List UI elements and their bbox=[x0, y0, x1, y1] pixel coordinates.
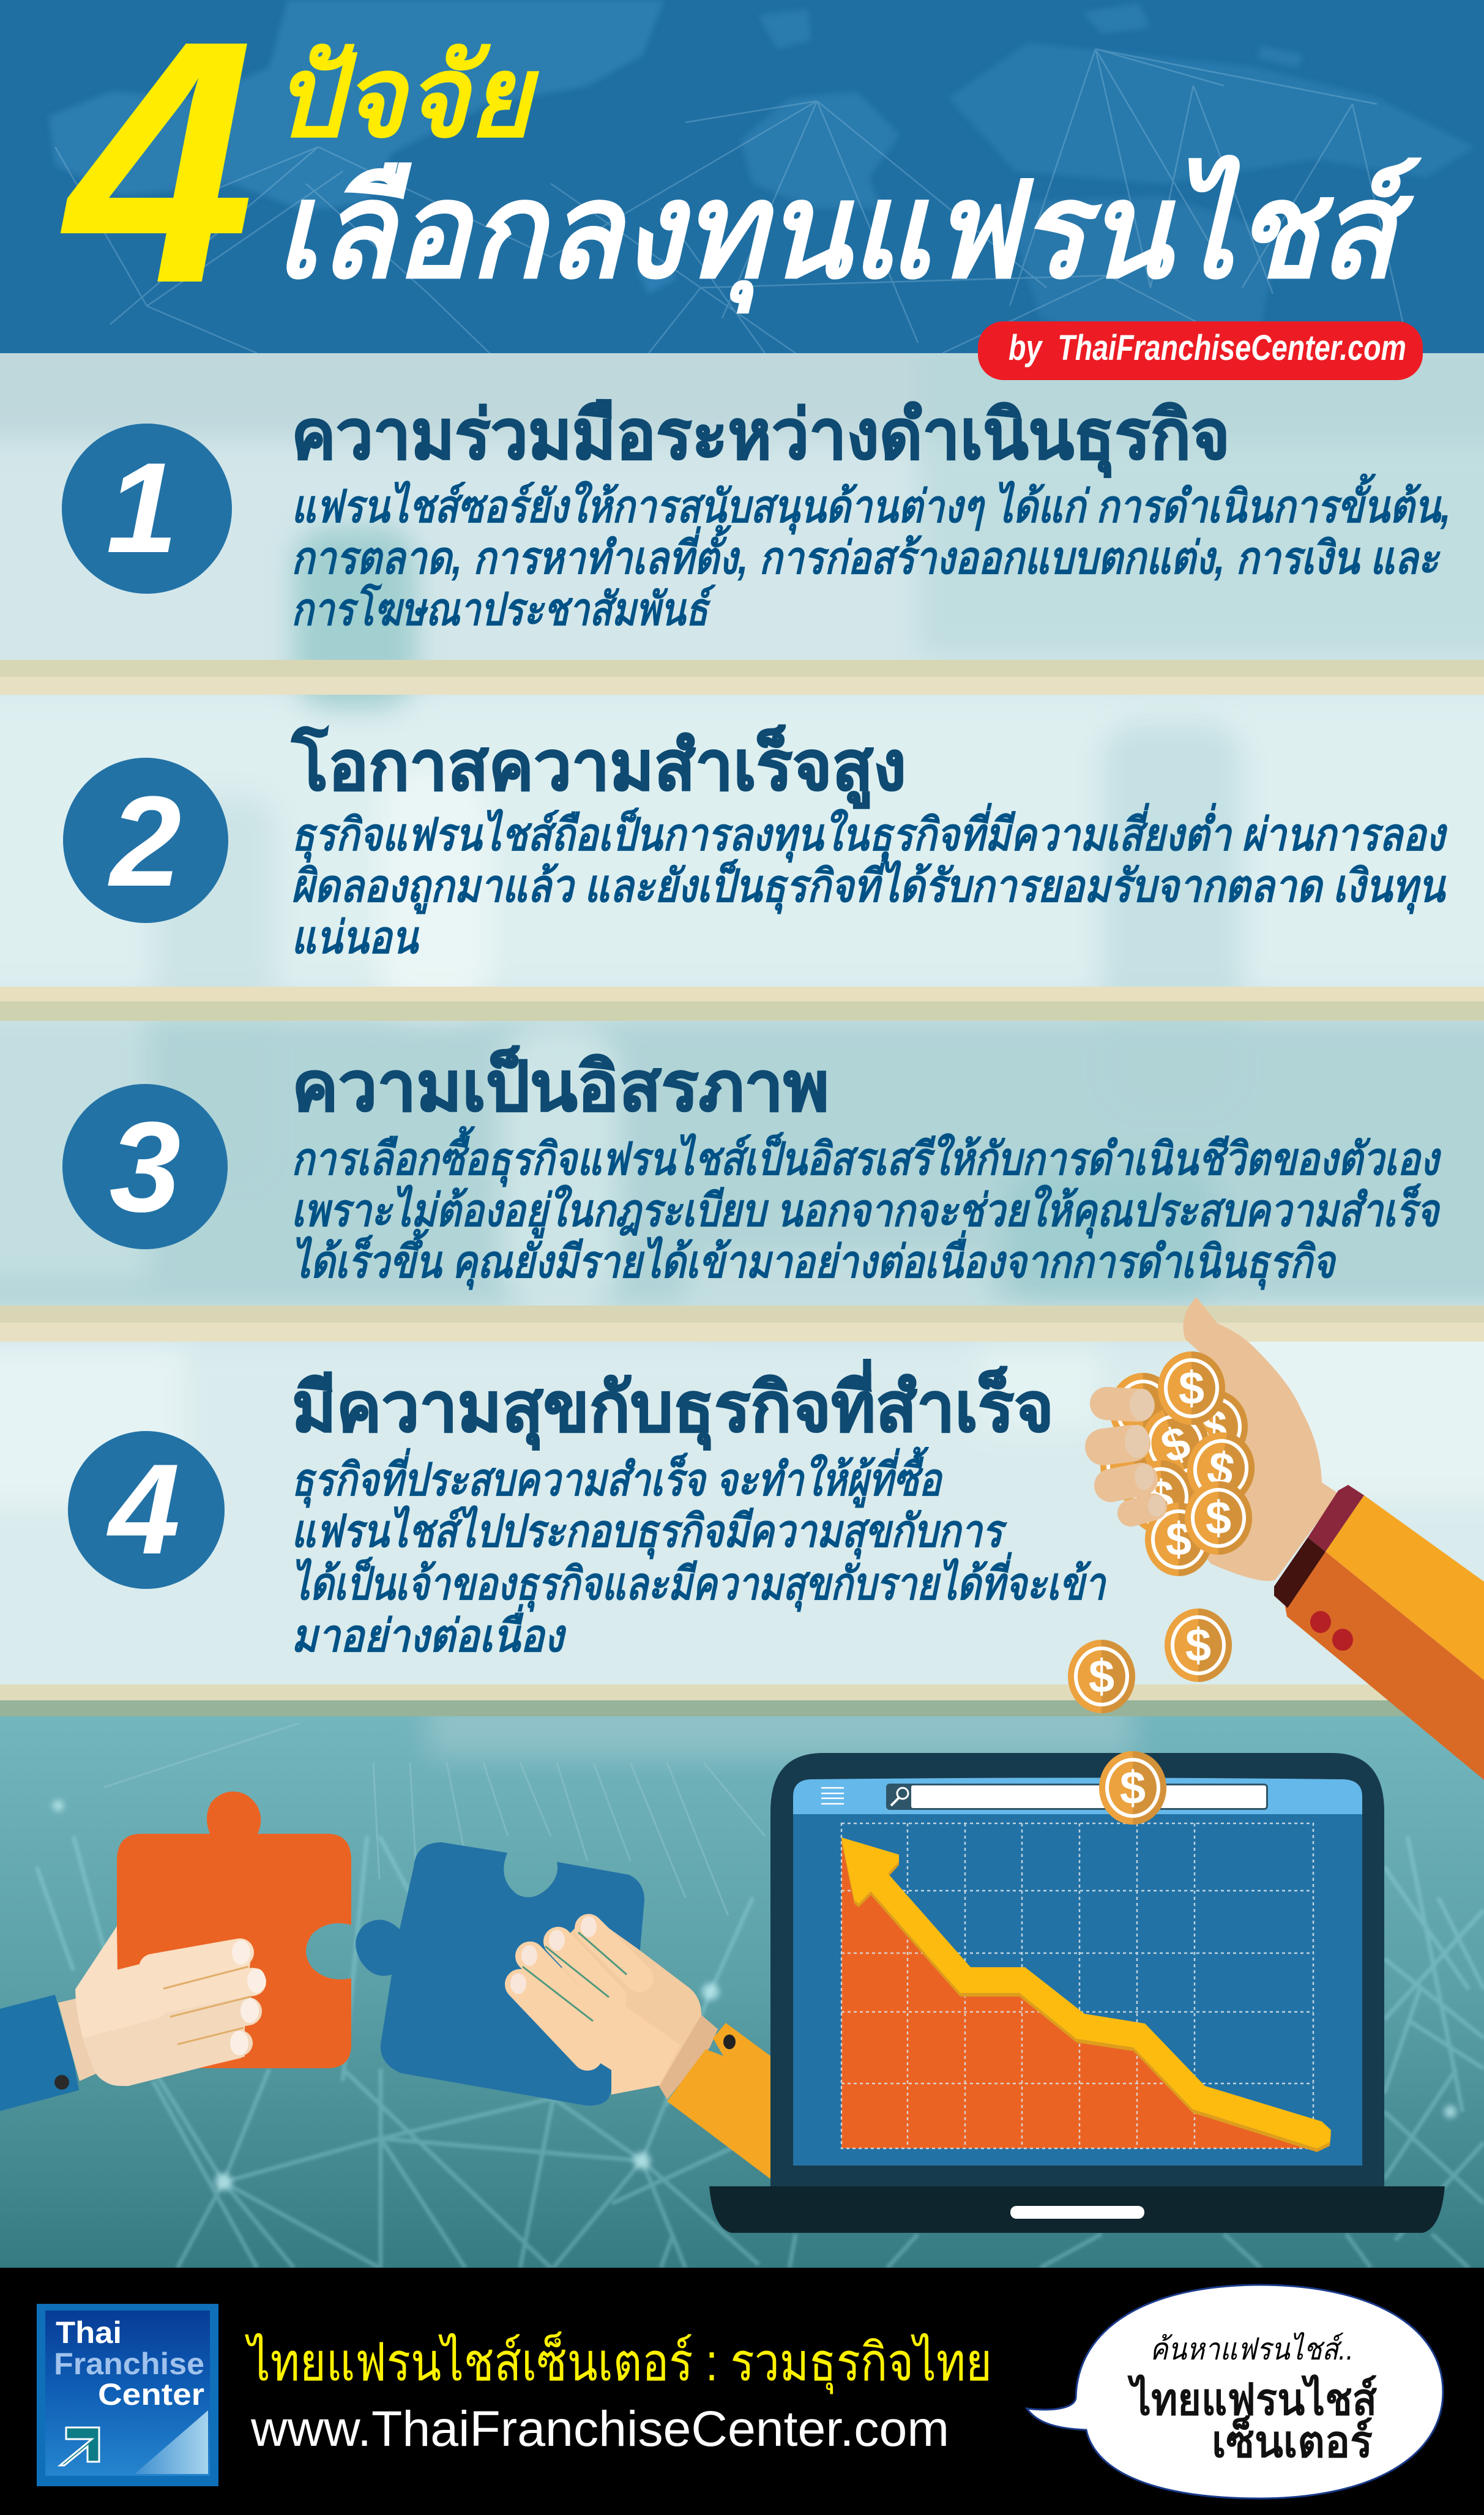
trackpad pill bbox=[1010, 2206, 1144, 2219]
laptop base bbox=[709, 2186, 1445, 2233]
cuff bbox=[1274, 1485, 1364, 1608]
panel: factor 1 bbox=[62, 397, 1451, 635]
chart arrow bbox=[841, 1837, 1331, 2152]
held coins bbox=[1100, 1351, 1261, 1576]
coin: falling right bbox=[1165, 1609, 1232, 1682]
logo: Franchise bbox=[54, 2347, 204, 2381]
heading 1: ความร่วมมือระหว่างดำเนินธุรกิจ bbox=[291, 397, 1230, 478]
blue puzzle piece bbox=[356, 1842, 644, 2106]
cuff buttons bbox=[1310, 1611, 1353, 1651]
sleeve bbox=[1285, 1495, 1484, 1780]
number badge 2 bbox=[63, 758, 228, 923]
chart grid bbox=[841, 1823, 1313, 2148]
fingers bbox=[1103, 1389, 1165, 1517]
body 4: ได้เป็นเจ้าของธุรกิจและมีความสุขกับรายได้ที่จะเข้า bbox=[291, 1552, 1107, 1612]
network lines bbox=[37, 1836, 1484, 2268]
panel: factor 2 bbox=[63, 725, 1448, 963]
body 3 bbox=[291, 1126, 1442, 1290]
number badge 2: 2 bbox=[108, 769, 181, 913]
laptop body bbox=[770, 1753, 1384, 2186]
heading 3: ความเป็นอิสรภาพ bbox=[292, 1045, 829, 1125]
orange puzzle piece bbox=[117, 1792, 351, 2068]
held coins: $ bbox=[1148, 1471, 1174, 1523]
body 4: แฟรนไชส์ไปประกอบธุรกิจมีความสุขกับการ bbox=[291, 1505, 1008, 1560]
held coins: $ bbox=[1166, 1514, 1191, 1566]
panel: bottom teal scene background bbox=[0, 1695, 1484, 2268]
panel: footer bbox=[0, 2268, 1484, 2515]
title: เลือกลงทุนแฟรนไชส์: เลือกลงทุนแฟรนไชส์ bbox=[275, 154, 1422, 314]
coin: falling left: $ bbox=[1089, 1651, 1114, 1703]
coin on laptop bbox=[1099, 1751, 1166, 1825]
body 2 bbox=[291, 802, 1448, 963]
number badge 1: 1 bbox=[106, 436, 177, 580]
logo arrow icon bbox=[60, 2427, 99, 2465]
badge: by ThaiFranchiseCenter.com bbox=[978, 321, 1423, 380]
held coins: $ bbox=[1206, 1492, 1231, 1544]
speech bubble: ค้นหาแฟรนไชส์.. bbox=[1150, 2332, 1354, 2366]
number badge 1 bbox=[62, 424, 232, 594]
illustration: laptop with chart bbox=[709, 1751, 1445, 2233]
panel: factor 4 bbox=[68, 1359, 1107, 1661]
body 1 bbox=[291, 473, 1451, 635]
body 4: ธุรกิจที่ประสบความสำเร็จ จะทำให้ผู้ที่ซื้อ bbox=[291, 1446, 943, 1508]
held coins: $ bbox=[1179, 1362, 1204, 1414]
body 4 bbox=[291, 1446, 1107, 1661]
logo: Center bbox=[98, 2377, 204, 2412]
logo bbox=[37, 2304, 218, 2486]
network lines bbox=[55, 49, 1408, 353]
illustration: puzzle hands bbox=[0, 1792, 770, 2179]
footer yellow line: ไทยแฟรนไชส์เซ็นเตอร์ : รวมธุรกิจไทย bbox=[245, 2331, 992, 2394]
coin: falling right: $ bbox=[1185, 1620, 1211, 1672]
footer url: www.ThaiFranchiseCenter.com bbox=[250, 2401, 949, 2457]
left wrist bbox=[58, 1998, 107, 2081]
right hand bbox=[510, 1914, 701, 2095]
body 4: มาอย่างต่อเนื่อง bbox=[291, 1604, 567, 1661]
number badge 4 bbox=[68, 1431, 225, 1589]
logo: Thai bbox=[56, 2315, 122, 2350]
illustration: hand dropping coins bbox=[1100, 1297, 1484, 1780]
left hand bbox=[75, 1926, 266, 2086]
speech bubble bbox=[1027, 2285, 1443, 2498]
held coins: $ bbox=[1201, 1401, 1227, 1453]
heading 2: โอกาสความสำเร็จสูง bbox=[291, 725, 906, 809]
divider stripes bbox=[0, 660, 1484, 1716]
panel: factor 3 bbox=[62, 1045, 1442, 1290]
held coins: $ bbox=[1204, 1441, 1238, 1497]
speech bubble: ไทยแฟรนไชส์ bbox=[1127, 2374, 1377, 2424]
number badge 4: 4 bbox=[106, 1437, 180, 1581]
blurred photo backdrop bbox=[0, 353, 1484, 1518]
title: ปัจจัย: ปัจจัย bbox=[274, 34, 540, 160]
coin on laptop: $ bbox=[1120, 1762, 1146, 1814]
chart orange area bbox=[841, 1837, 1313, 2148]
panel: header background bbox=[0, 0, 1484, 355]
body 2: แน่นอน bbox=[291, 912, 420, 963]
body 1: การโฆษณาประชาสัมพันธ์ bbox=[291, 583, 716, 635]
browser bar bbox=[793, 1777, 1362, 1814]
held coins: $ bbox=[1155, 1416, 1197, 1474]
heading 4: มีความสุขกับธุรกิจที่สำเร็จ bbox=[292, 1359, 1054, 1451]
menu icon bbox=[821, 1788, 844, 1804]
palm and thumb bbox=[1132, 1297, 1338, 1581]
world map backdrop bbox=[49, 0, 1475, 353]
screen bbox=[793, 1814, 1362, 2166]
panel: content background bbox=[0, 331, 1484, 1718]
number badge 3: 3 bbox=[110, 1095, 181, 1239]
number badge 3 bbox=[62, 1084, 228, 1249]
search bar bbox=[886, 1784, 1268, 1810]
right hand wrist and orange sleeve bbox=[658, 2015, 770, 2179]
left sleeve bbox=[0, 1995, 79, 2111]
speech bubble: เซ็นเตอร์ bbox=[1212, 2415, 1373, 2467]
coin: falling left bbox=[1068, 1640, 1135, 1713]
